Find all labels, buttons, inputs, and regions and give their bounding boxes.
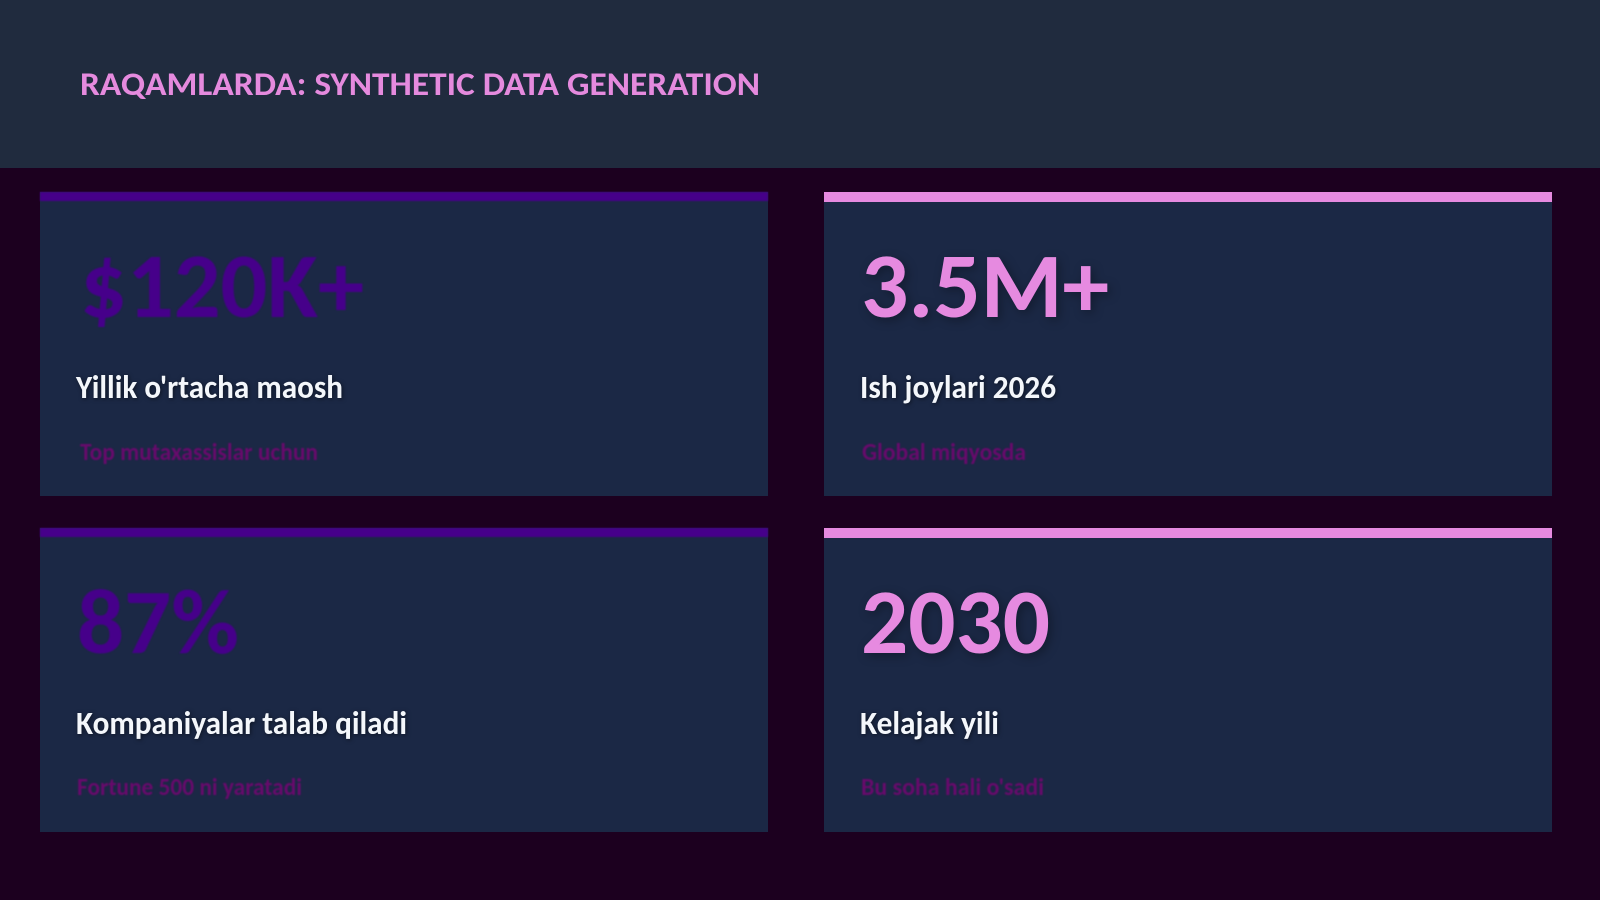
label: salary: Yillik o'rtacha maosh xyxy=(75,368,343,407)
note: jobs: Global miqyosda xyxy=(862,438,1026,467)
panel: companies stat xyxy=(40,528,768,832)
big number: salary: $120K+ xyxy=(80,229,364,342)
label: companies: Kompaniyalar talab qiladi xyxy=(76,704,407,743)
big number: companies: 87% xyxy=(77,565,239,678)
header band xyxy=(0,0,1600,168)
label: year: Kelajak yili xyxy=(860,704,999,743)
big number: year: 2030 xyxy=(861,565,1050,678)
big number: jobs: 3.5M+ xyxy=(861,229,1109,342)
note: companies: Fortune 500 ni yaratadi xyxy=(77,773,302,802)
label: jobs: Ish joylari 2026 xyxy=(860,368,1056,407)
panel: future year stat xyxy=(824,528,1552,832)
note: salary: Top mutaxassislar uchun xyxy=(80,438,318,467)
note: year: Bu soha hali o'sadi xyxy=(861,773,1044,802)
title: RAQAMLARDA: SYNTHETIC DATA GENERATION xyxy=(80,64,760,104)
panel: jobs stat xyxy=(824,192,1552,496)
panel: salary stat xyxy=(40,192,768,496)
